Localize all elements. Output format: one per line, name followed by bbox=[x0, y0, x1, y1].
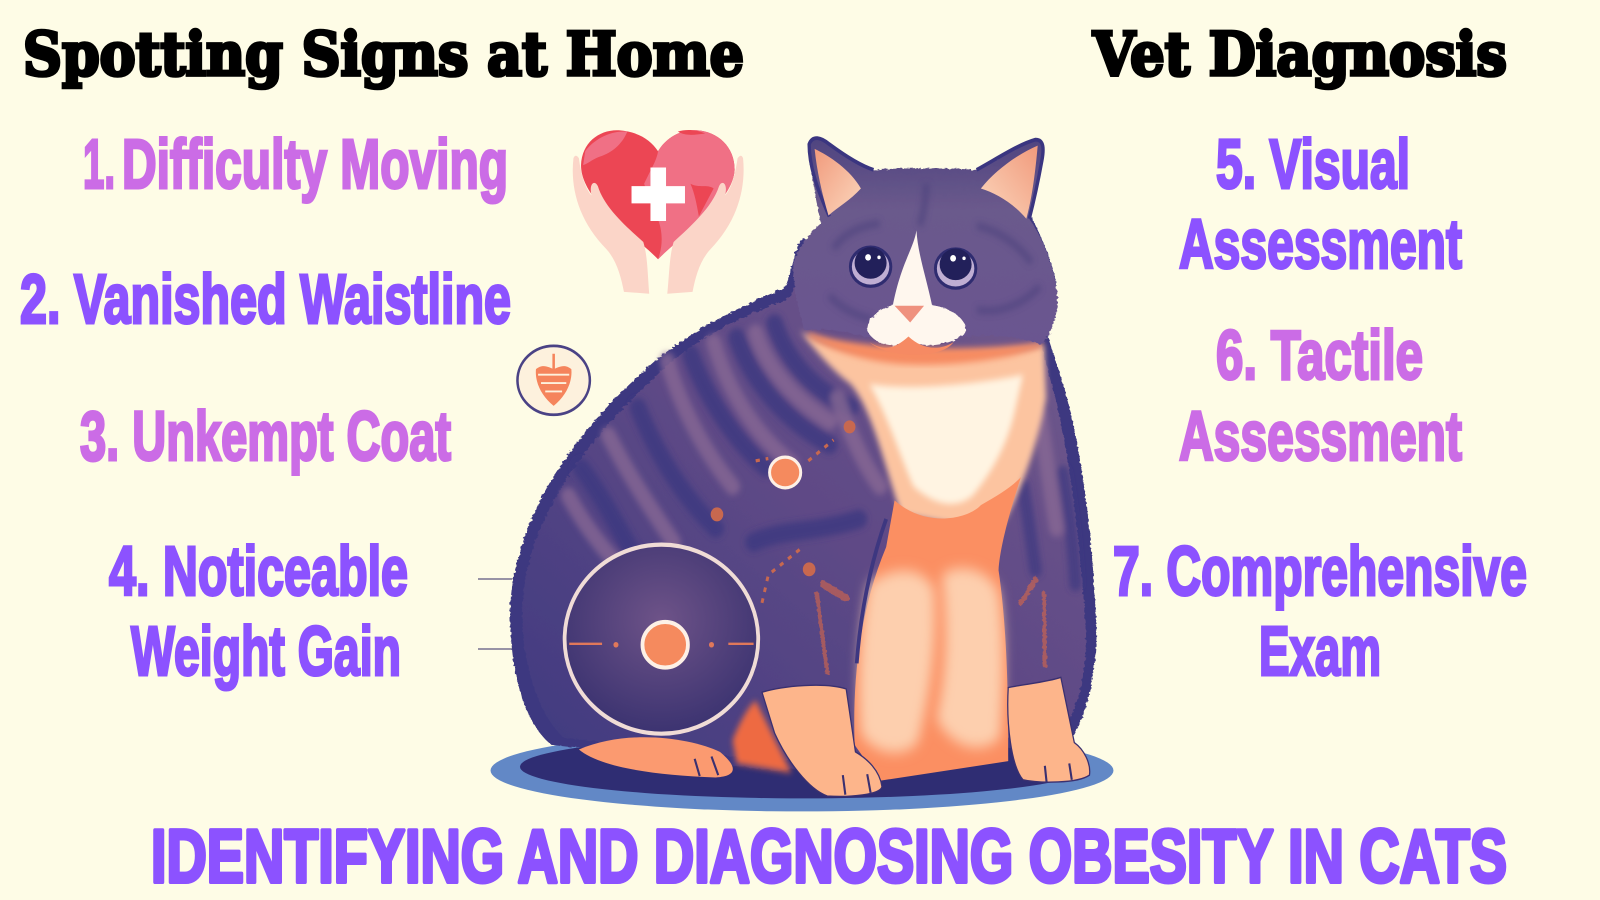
front paw right bbox=[1008, 677, 1090, 782]
medical cross bbox=[632, 168, 685, 221]
left eye bbox=[850, 247, 891, 286]
marker dots bbox=[711, 420, 855, 603]
step 6: Tactile Assessment: Assessment bbox=[1179, 397, 1462, 475]
ear outlines bbox=[809, 138, 1043, 219]
sign 1: Difficulty Moving: Difficulty Moving bbox=[122, 125, 508, 203]
belly bbox=[854, 477, 1021, 781]
sign 1: Difficulty Moving: 1. bbox=[83, 125, 115, 203]
magnifier circle bbox=[565, 545, 758, 734]
icon: heart with cross in hands bbox=[573, 130, 744, 294]
right eye bbox=[935, 249, 976, 288]
cat body bbox=[510, 216, 1097, 770]
heading: Vet Diagnosis: Vet Diagnosis bbox=[1092, 20, 1507, 90]
sign 2: Vanished Waistline: 2. Vanished Waistline bbox=[20, 260, 511, 338]
step 6: Tactile Assessment bbox=[1179, 316, 1462, 475]
sign 4: Noticeable Weight Gain: Weight Gain bbox=[131, 612, 401, 690]
leg details bbox=[817, 580, 1045, 673]
step 5: Visual Assessment: Assessment bbox=[1179, 205, 1462, 283]
step 7: Comprehensive Exam bbox=[1113, 532, 1527, 690]
heart bbox=[581, 130, 735, 259]
step 5: Visual Assessment bbox=[1179, 125, 1462, 283]
nose bbox=[895, 306, 924, 323]
right ear bbox=[981, 146, 1038, 219]
step 6: Tactile Assessment: 6. Tactile bbox=[1216, 316, 1423, 394]
lips bbox=[869, 337, 954, 355]
illustration: cat with icons bbox=[491, 130, 1113, 811]
heading: Spotting Signs at Home: Spotting Signs at Home bbox=[23, 20, 744, 90]
front paw left bbox=[762, 685, 882, 796]
pointer lines bbox=[478, 579, 512, 649]
forehead markings bbox=[829, 184, 1040, 319]
right hand bbox=[667, 156, 744, 294]
rear foot bbox=[579, 701, 791, 777]
left ear bbox=[815, 149, 861, 215]
left hand bbox=[573, 156, 649, 294]
white blaze bbox=[892, 230, 932, 307]
sign 4: Noticeable Weight Gain: 4. Noticeable bbox=[109, 532, 408, 610]
chest and collar bbox=[800, 330, 1046, 533]
ground shadow bbox=[491, 729, 1113, 811]
cat head bbox=[793, 138, 1058, 355]
sign 1: Difficulty Moving bbox=[83, 125, 508, 203]
step 5: Visual Assessment: 5. Visual bbox=[1216, 125, 1410, 203]
icon: digestive organ badge bbox=[517, 346, 590, 415]
muzzle bbox=[867, 305, 966, 345]
sign 4: Noticeable Weight Gain bbox=[109, 532, 408, 690]
sign 3: Unkempt Coat: 3. Unkempt Coat bbox=[80, 397, 451, 475]
step 7: Comprehensive Exam: Exam bbox=[1259, 612, 1381, 690]
fur stripes bbox=[568, 323, 1076, 584]
